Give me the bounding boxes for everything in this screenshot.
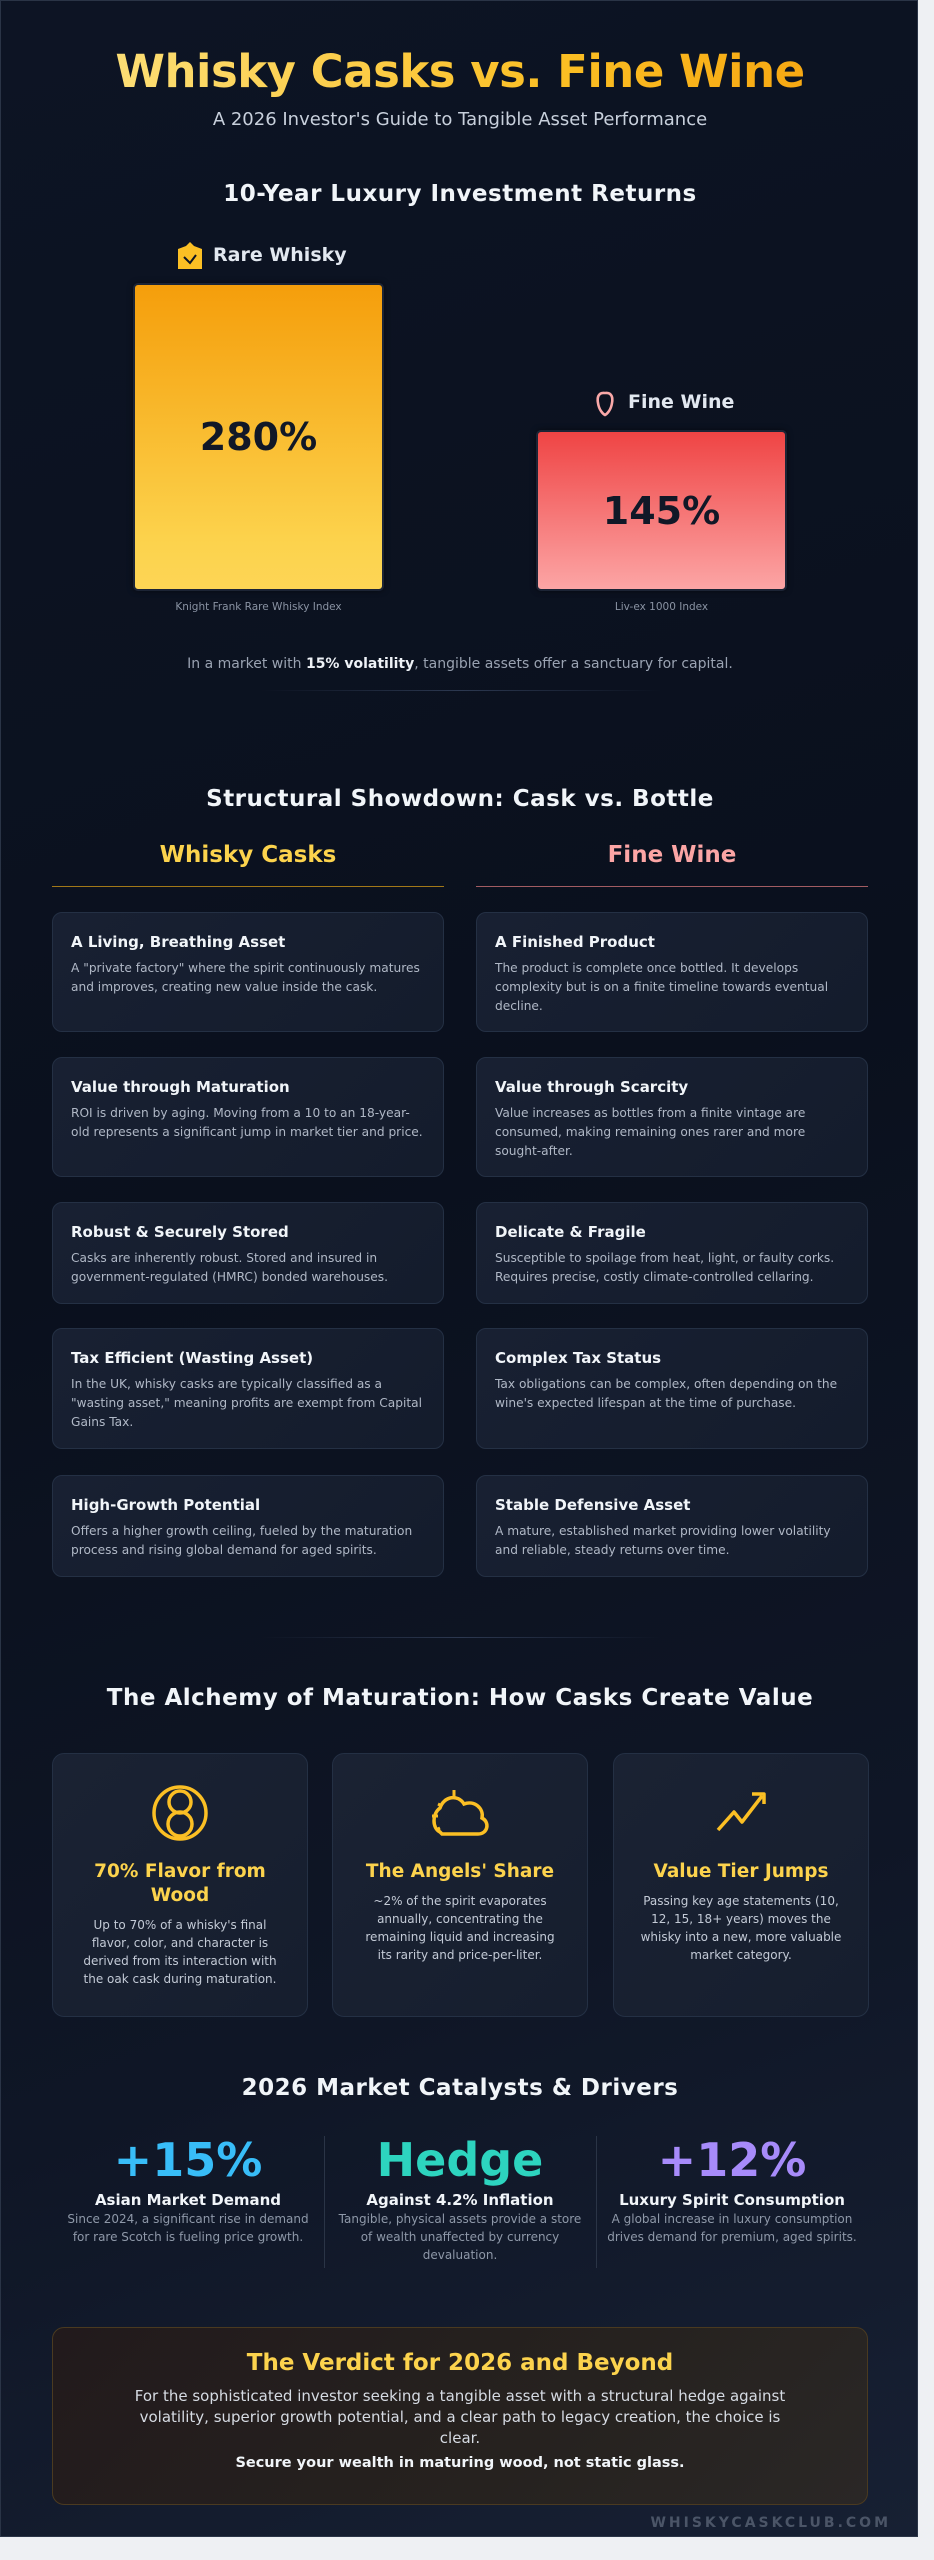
stat: asian demand: Asian Market Demand bbox=[95, 2191, 281, 2209]
card: maturation bbox=[52, 1057, 444, 1177]
bar: wine 145% bbox=[536, 430, 787, 591]
stat: hedge bbox=[338, 2133, 581, 2262]
card: robust: Robust & Securely Stored bbox=[71, 1223, 289, 1241]
card: defensive: A mature, established market providing lower volatility and reliable, steady returns over time. bbox=[495, 1524, 831, 1557]
subtitle: A 2026 Investor's Guide to Tangible Asset Performance bbox=[213, 109, 707, 130]
verdict text: For the sophisticated investor seeking a tangible asset with a structural hedge against volatility, superior growth potential, and a clear path to legacy creation, the choice is clear. bbox=[135, 2387, 785, 2447]
card: finished product: A Finished Product bbox=[495, 933, 655, 951]
bar: whisky 280%: 280% bbox=[200, 415, 317, 459]
card: flavor from wood: Up to 70% of a whisky's final flavor, color, and character is derived from its interaction with the oak cask during maturation. bbox=[83, 1918, 277, 1986]
column header: whisky bbox=[52, 842, 444, 887]
card: angels share: The Angels' Share bbox=[366, 1861, 554, 1882]
icon: whisky bbox=[178, 242, 202, 269]
heading: showdown: Structural Showdown: Cask vs. Bottle bbox=[206, 786, 714, 812]
icon: wood rings bbox=[152, 1785, 208, 1841]
stat: hedge: Against 4.2% Inflation bbox=[366, 2191, 554, 2209]
column header: wine: Fine Wine bbox=[608, 842, 736, 868]
column header: whisky: Whisky Casks bbox=[160, 842, 336, 868]
stat: luxury consumption: Luxury Spirit Consumption bbox=[619, 2191, 845, 2209]
column header: wine bbox=[476, 842, 868, 887]
verdict callout: Secure your wealth in maturing wood, not static glass. bbox=[235, 2455, 685, 2471]
label: rare whisky: Rare Whisky bbox=[213, 244, 347, 266]
verdict box bbox=[52, 2327, 868, 2505]
stat: hedge: Hedge bbox=[377, 2133, 543, 2187]
source: whisky: Knight Frank Rare Whisky Index bbox=[175, 601, 342, 613]
card: angels share bbox=[332, 1753, 588, 2017]
card: robust: Casks are inherently robust. Stored and insured in government-regulated (HMRC) bonded warehouses. bbox=[71, 1251, 388, 1284]
title: Whisky Casks vs. Fine Wine bbox=[115, 45, 805, 98]
card: complex tax: Complex Tax Status bbox=[495, 1349, 661, 1367]
card: fragile: Susceptible to spoilage from heat, light, or faulty corks. Requires precise, costly climate-controlled cellaring. bbox=[495, 1251, 834, 1284]
label: fine wine bbox=[596, 391, 734, 416]
card: high growth bbox=[52, 1475, 444, 1577]
stat: luxury consumption: +12% bbox=[658, 2133, 806, 2187]
card: high growth: Offers a higher growth ceiling, fueled by the maturation process and rising global demand for aged spirits. bbox=[71, 1524, 412, 1557]
card: living asset: A Living, Breathing Asset bbox=[71, 933, 285, 951]
card: value tier jumps bbox=[613, 1753, 869, 2017]
verdict title: The Verdict for 2026 and Beyond bbox=[247, 2350, 673, 2376]
stat: hedge: Tangible, physical assets provide a store of wealth unaffected by currency devaluation. bbox=[339, 2212, 581, 2262]
volatility note: In a market with 15% volatility, tangible assets offer a sanctuary for capital. bbox=[187, 656, 733, 672]
heading: alchemy: The Alchemy of Maturation: How Casks Create Value bbox=[107, 1685, 813, 1711]
stat: luxury consumption: A global increase in luxury consumption drives demand for premium, aged spirits. bbox=[607, 2212, 857, 2244]
card: scarcity bbox=[476, 1057, 868, 1177]
stat: asian demand: +15% bbox=[114, 2133, 262, 2187]
card: living asset: A "private factory" where the spirit continuously matures and improves, creating new value inside the cask. bbox=[71, 961, 420, 994]
stat: asian demand: Since 2024, a significant rise in demand for rare Scotch is fueling price growth. bbox=[67, 2212, 309, 2244]
card: tax efficient bbox=[52, 1328, 444, 1449]
icon: trend up bbox=[716, 1792, 766, 1832]
card: finished product: The product is complete once bottled. It develops complexity but is on a finite timeline towards eventual decline. bbox=[495, 961, 828, 1013]
label: rare whisky bbox=[178, 242, 347, 269]
card: value tier jumps: Value Tier Jumps bbox=[654, 1861, 828, 1882]
card: defensive: Stable Defensive Asset bbox=[495, 1496, 690, 1514]
card: defensive bbox=[476, 1475, 868, 1577]
footer brand: WHISKYCASKCLUB.COM bbox=[650, 2515, 891, 2531]
heading: catalysts: 2026 Market Catalysts & Drivers bbox=[242, 2075, 678, 2101]
card: maturation: Value through Maturation bbox=[71, 1078, 290, 1096]
card: fragile: Delicate & Fragile bbox=[495, 1223, 646, 1241]
card: tax efficient: In the UK, whisky casks are typically classified as a "wasting asset," meaning profits are exempt from Capital Gains Tax. bbox=[71, 1377, 422, 1429]
card: tax efficient: Tax Efficient (Wasting Asset) bbox=[71, 1349, 313, 1367]
icon: wine bbox=[596, 392, 614, 416]
card: complex tax: Tax obligations can be complex, often depending on the wine's expected lifespan at the time of purchase. bbox=[495, 1377, 837, 1410]
card: flavor from wood bbox=[52, 1753, 308, 2017]
bar: whisky 280% bbox=[133, 283, 384, 591]
bar: wine 145%: 145% bbox=[603, 488, 720, 532]
icon: cloud bbox=[432, 1790, 489, 1836]
card: flavor from wood: 70% Flavor from Wood bbox=[94, 1861, 266, 1906]
stat: asian demand bbox=[67, 2133, 309, 2244]
stat: luxury consumption bbox=[607, 2133, 857, 2244]
card: finished product bbox=[476, 912, 868, 1032]
source: wine: Liv-ex 1000 Index bbox=[615, 601, 708, 613]
card: scarcity: Value increases as bottles from a finite vintage are consumed, making remaining ones rarer and more sought-after. bbox=[495, 1106, 805, 1158]
card: high growth: High-Growth Potential bbox=[71, 1496, 260, 1514]
card: angels share: ~2% of the spirit evaporates annually, concentrating the remaining liquid and increasing its rarity and price-per-liter. bbox=[365, 1894, 555, 1962]
card: complex tax bbox=[476, 1328, 868, 1449]
card: living asset bbox=[52, 912, 444, 1032]
card: maturation: ROI is driven by aging. Moving from a 10 to an 18-year-old represents a significant jump in market tier and price. bbox=[71, 1106, 423, 1139]
heading: returns: 10-Year Luxury Investment Returns bbox=[223, 181, 697, 207]
card: robust bbox=[52, 1202, 444, 1304]
card: scarcity: Value through Scarcity bbox=[495, 1078, 688, 1096]
card: fragile bbox=[476, 1202, 868, 1304]
label: fine wine: Fine Wine bbox=[628, 391, 734, 413]
card: value tier jumps: Passing key age statements (10, 12, 15, 18+ years) moves the whisky into a new, more valuable market category. bbox=[641, 1894, 841, 1962]
